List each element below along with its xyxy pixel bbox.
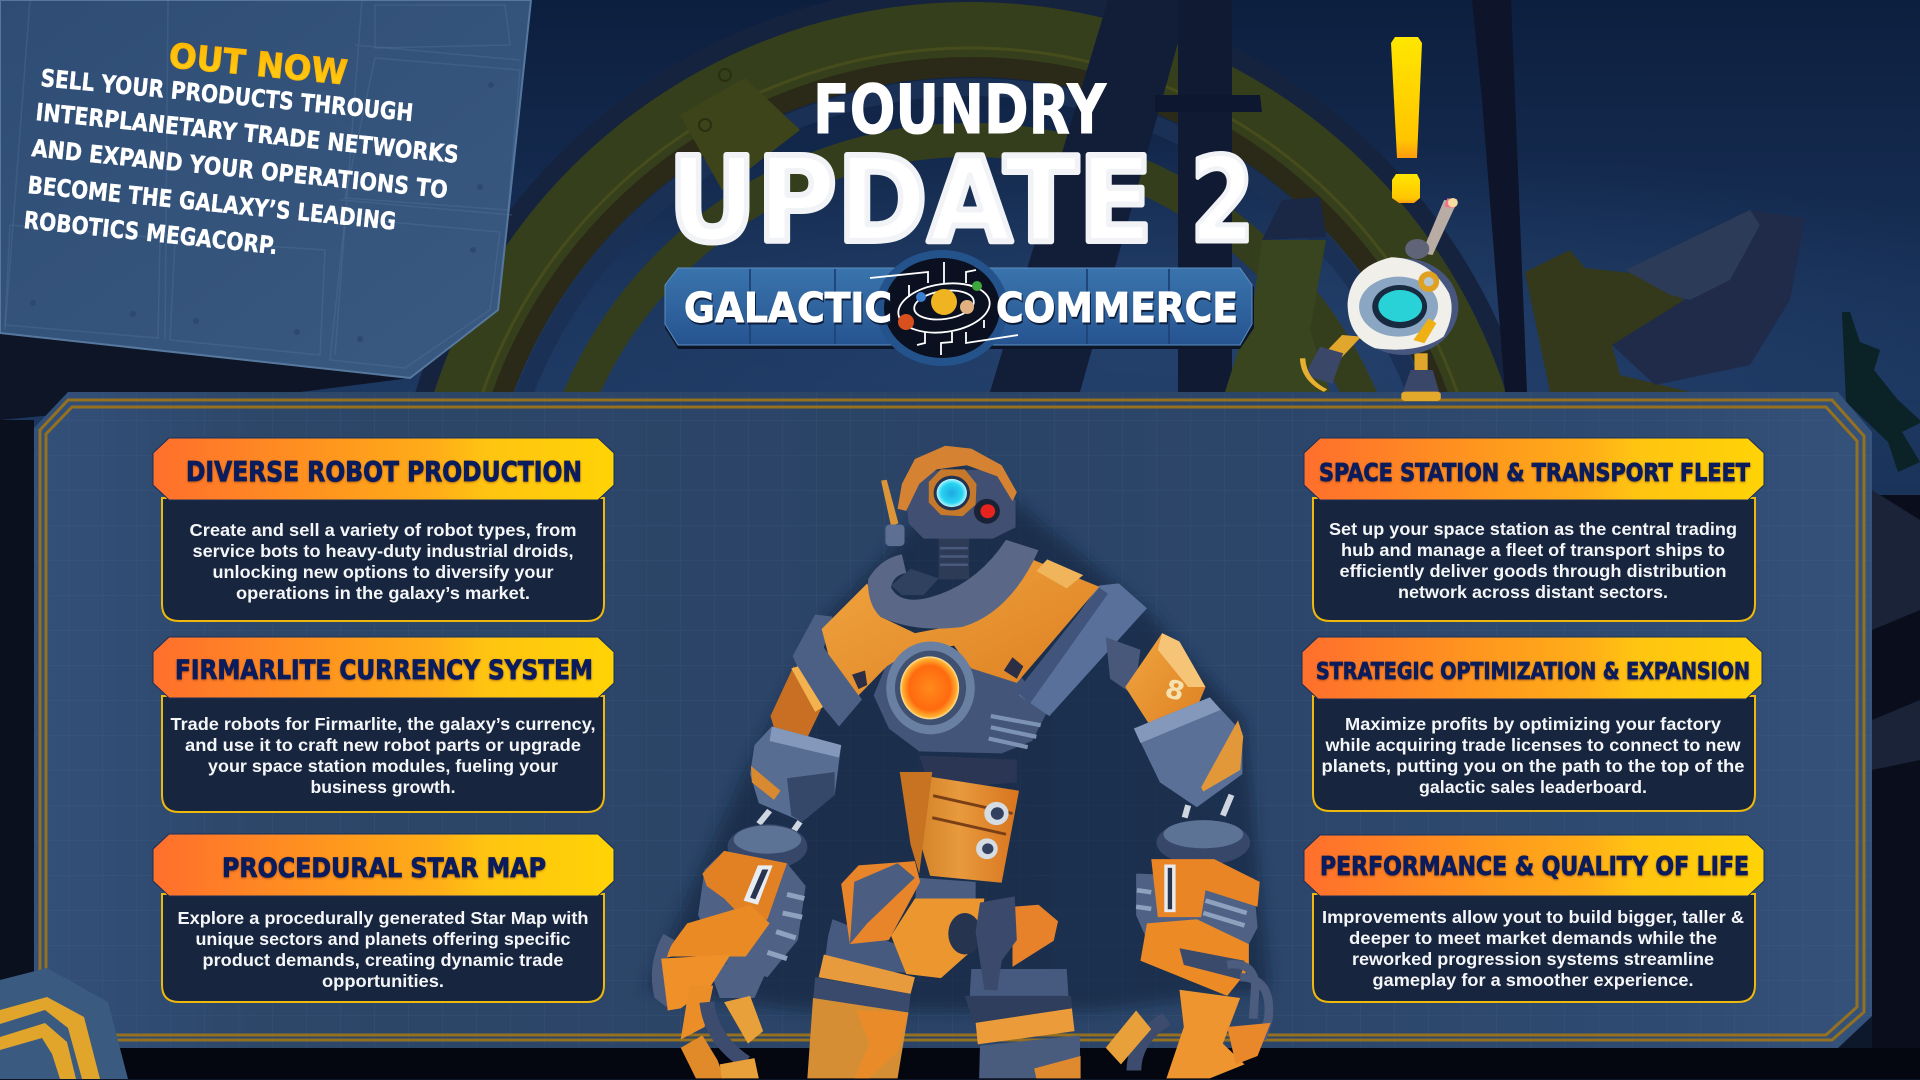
logo: galactic commerce banner: GALACTIC (684, 284, 892, 332)
left bracket on the ring (680, 78, 800, 190)
out now heading: OUT NOW (167, 36, 349, 93)
card: procedural star map: product demands, creating dynamic trade (202, 950, 564, 970)
card: procedural star map: unique sectors and planets offering specific (196, 929, 571, 949)
right side tree and rock (1842, 312, 1920, 472)
large orange robot: 8 (1162, 675, 1188, 708)
notice body text: AND EXPAND YOUR OPERATIONS TO (30, 134, 449, 204)
card: space station and transport fleet: network across distant sectors. (1398, 582, 1668, 602)
dark left lower structure (0, 333, 410, 420)
emblem (870, 250, 1018, 366)
card: firmarlite currency system: FIRMARLITE CURRENCY SYSTEM (175, 655, 593, 686)
notice body text (22, 64, 460, 260)
left forearm (698, 851, 806, 977)
left rods (759, 811, 800, 834)
title: Update 2: UPDATE (668, 131, 1153, 269)
olive bracket (1525, 250, 1695, 392)
card: procedural star map (153, 834, 614, 1002)
title: Foundry: FOUNDRY (813, 71, 1107, 150)
antenna (881, 480, 898, 526)
legs (1323, 335, 1361, 360)
card: performance and quality of life: reworked progression systems streamline (1352, 949, 1714, 969)
large orange robot (646, 446, 1271, 1078)
exclamation mark icon (1391, 37, 1422, 203)
card: strategic optimization and expansion: galactic sales leaderboard. (1419, 777, 1647, 797)
central dark pylons (990, 0, 1190, 392)
card: strategic optimization and expansion (1302, 637, 1762, 811)
left thigh (841, 861, 920, 944)
card: firmarlite currency system (153, 637, 614, 812)
right lower leg (969, 969, 1069, 1006)
notice body text: ROBOTICS MEGACORP. (22, 206, 279, 260)
right rods (1185, 795, 1232, 818)
card: strategic optimization and expansion: Maximize profits by optimizing your factory (1345, 714, 1721, 734)
card: performance and quality of life: gameplay for a smoother experience. (1372, 970, 1694, 990)
left upper arm (770, 666, 822, 750)
logo: galactic commerce banner (665, 250, 1254, 366)
card: space station and transport fleet: efficiently deliver goods through distribution (1340, 561, 1726, 581)
card: procedural star map: opportunities. (322, 971, 444, 991)
card: procedural star map: Explore a procedurally generated Star Map with (178, 908, 588, 928)
chest armour (822, 559, 1099, 695)
card: space station and transport fleet: hub and manage a fleet of transport ships to (1341, 540, 1725, 560)
head (906, 469, 1016, 539)
left elbow (750, 726, 841, 822)
left wrist (728, 824, 807, 869)
right hand (1227, 964, 1269, 1039)
corner emblem bottom left (0, 968, 128, 1079)
card: firmarlite currency system: and use it to craft new robot parts or upgrade (185, 735, 581, 755)
card: performance and quality of life: deeper to meet market demands while the (1349, 928, 1717, 948)
card: strategic optimization and expansion: STRATEGIC OPTIMIZATION & EXPANSION (1316, 659, 1750, 685)
right elbow (1134, 697, 1242, 807)
dark ring (398, 0, 1542, 565)
card: diverse robot production: Create and sell a variety of robot types, from (190, 520, 576, 540)
torso inner (874, 637, 1047, 753)
body (1349, 258, 1458, 355)
logo: galactic commerce banner: COMMERCE (996, 284, 1238, 332)
notice body text: INTERPLANETARY TRADE NETWORKS (34, 98, 460, 169)
small robot companion (1303, 198, 1458, 401)
left hand (652, 934, 676, 1006)
left lower leg (824, 919, 917, 973)
antenna (1422, 200, 1457, 255)
right thigh (891, 898, 984, 978)
pelvis (915, 878, 976, 907)
card: strategic optimization and expansion: planets, putting you on the path to the top of the (1322, 756, 1745, 776)
right wrist (1156, 820, 1250, 865)
card: firmarlite currency system: your space station modules, fueling your (208, 756, 558, 776)
card: diverse robot production: service bots to heavy-duty industrial droids, (192, 541, 574, 561)
card: space station and transport fleet: Set up your space station as the central trading (1329, 519, 1737, 539)
card: strategic optimization and expansion: while acquiring trade licenses to connect to new (1324, 735, 1741, 755)
right pole (1472, 0, 1527, 392)
grey duct (1612, 210, 1805, 385)
right upper arm (1106, 637, 1140, 695)
notice body text: BECOME THE GALAXY’S LEADING (26, 171, 397, 236)
card: performance and quality of life: PERFORMANCE & QUALITY OF LIFE (1320, 852, 1749, 882)
card: diverse robot production: operations in the galaxy’s market. (236, 583, 530, 603)
card: performance and quality of life (1304, 835, 1764, 1002)
card: firmarlite currency system: Trade robots for Firmarlite, the galaxy’s currency, (170, 714, 596, 734)
knee (1012, 905, 1058, 967)
card: diverse robot production (153, 438, 614, 621)
card: performance and quality of life: Improvements allow yout to build bigger, taller & (1322, 907, 1744, 927)
panel: main features board (34, 392, 1872, 1048)
left shoulder plate (793, 614, 862, 726)
neck collar (868, 540, 1039, 629)
card: space station and transport fleet (1304, 438, 1764, 621)
card: diverse robot production: DIVERSE ROBOT PRODUCTION (186, 455, 582, 488)
card: diverse robot production: unlocking new options to diversify your (212, 562, 554, 582)
right shoulder plate (1019, 583, 1147, 716)
card: firmarlite currency system: business growth. (310, 777, 456, 797)
notice body text: SELL YOUR PRODUCTS THROUGH (39, 64, 414, 127)
green elbow pipe (1225, 240, 1330, 392)
robot shadow (646, 455, 1271, 1010)
title: Update 2: 2 (1190, 131, 1255, 269)
panel: notice board (0, 0, 531, 378)
card: space station and transport fleet: SPACE STATION & TRANSPORT FLEET (1319, 458, 1750, 487)
right forearm (1136, 874, 1258, 969)
card: procedural star map: PROCEDURAL STAR MAP (222, 853, 546, 884)
neck (939, 536, 969, 579)
chest core (886, 641, 975, 734)
